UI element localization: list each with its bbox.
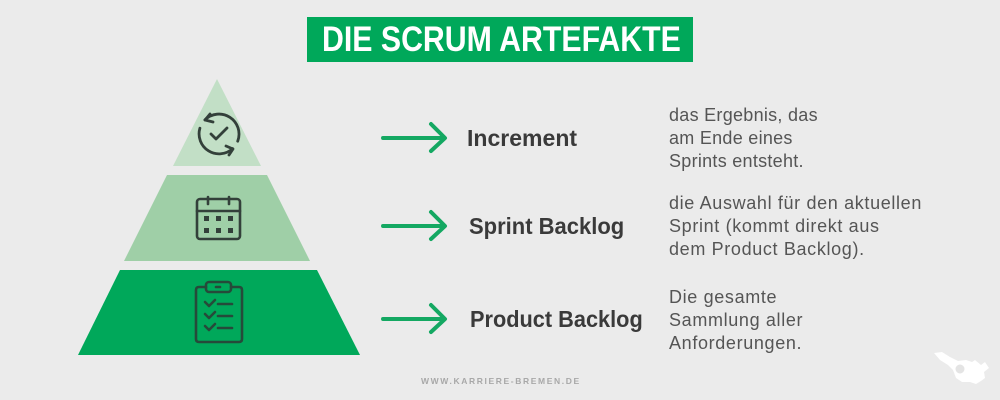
icon: calendar bbox=[197, 197, 240, 239]
description: sprint backlog: Sprint (kommt direkt aus bbox=[669, 216, 880, 236]
icon: clipboard bbox=[196, 282, 242, 342]
description: increment: Sprints entsteht. bbox=[669, 151, 804, 171]
description: sprint backlog bbox=[669, 193, 922, 259]
pyramid tier: sprint backlog bbox=[124, 175, 310, 261]
description: sprint backlog: die Auswahl für den aktuellen bbox=[669, 193, 922, 213]
description: product backlog bbox=[669, 287, 803, 353]
footer url: WWW.KARRIERE-BREMEN.DE bbox=[421, 376, 581, 386]
label: product backlog: Product Backlog bbox=[470, 306, 643, 332]
arrow: sprint backlog bbox=[383, 212, 445, 239]
description: product backlog: Anforderungen. bbox=[669, 333, 802, 353]
pyramid tier: increment bbox=[173, 79, 261, 166]
description: product backlog: Die gesamte bbox=[669, 287, 777, 307]
description: increment: das Ergebnis, das bbox=[669, 105, 818, 125]
arrow: product backlog bbox=[383, 305, 445, 332]
logo: bremen map bbox=[934, 352, 989, 384]
label: sprint backlog: Sprint Backlog bbox=[469, 213, 624, 239]
arrow: increment bbox=[383, 124, 445, 151]
description: increment: am Ende eines bbox=[669, 128, 793, 148]
description: increment bbox=[669, 105, 818, 171]
pyramid tier: product backlog bbox=[78, 270, 360, 355]
title: DIE SCRUM ARTEFAKTE bbox=[322, 20, 681, 59]
description: sprint backlog: dem Product Backlog). bbox=[669, 239, 865, 259]
description: product backlog: Sammlung aller bbox=[669, 310, 803, 330]
icon: cycle check bbox=[199, 114, 239, 155]
label: increment: Increment bbox=[467, 125, 577, 151]
